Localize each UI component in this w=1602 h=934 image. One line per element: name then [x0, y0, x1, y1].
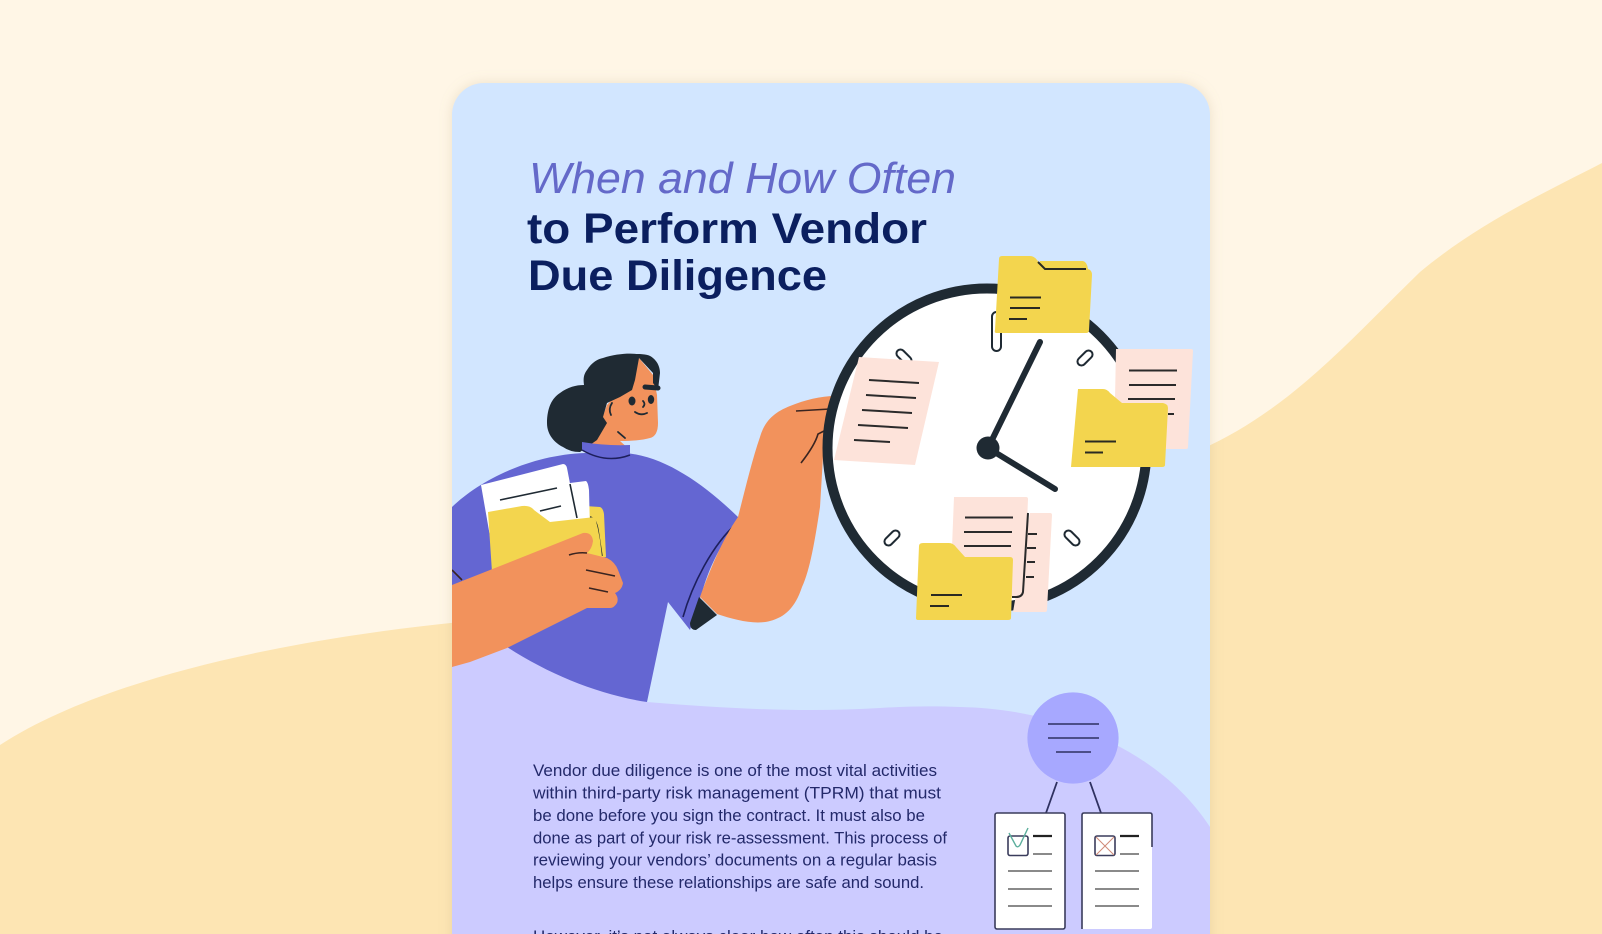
- clock hands: [976, 342, 1055, 489]
- body text: within third-party risk management (TPRM) that must: [532, 784, 941, 802]
- checklist approved: [995, 813, 1065, 929]
- left arm and hand: [452, 533, 623, 667]
- body text: done as part of your risk re-assessment. This process of: [533, 828, 947, 848]
- connectors: [1046, 782, 1101, 813]
- illustration: clock with documents: [828, 256, 1193, 620]
- title: [527, 154, 956, 300]
- face details: [610, 387, 658, 438]
- papers: [570, 481, 590, 519]
- circle node: [1027, 692, 1119, 784]
- hair: [547, 354, 660, 452]
- finger lines: [452, 553, 615, 592]
- lavender section: [452, 640, 1210, 934]
- title: When and How Often: [529, 154, 956, 203]
- background wave right: [1200, 163, 1602, 934]
- sleeve line: [682, 526, 732, 618]
- back folder: [589, 506, 606, 558]
- body text: reviewing your vendors’ documents on a regular basis: [533, 850, 937, 870]
- clock face: [828, 288, 1146, 608]
- front folder: [488, 506, 602, 572]
- body text: helps ensure these relationships are safe and sound.: [533, 873, 924, 892]
- shirt: [452, 453, 738, 702]
- background wave left: [0, 622, 460, 934]
- title: Due Diligence: [528, 252, 827, 300]
- illustration: woman holding folder: [452, 354, 836, 702]
- checklist rejected: [1082, 813, 1152, 929]
- body text: [532, 761, 947, 934]
- bottom documents and folder: [916, 497, 1052, 620]
- sleeve cuff: [690, 597, 717, 630]
- illustration: comparison diagram: [995, 692, 1152, 929]
- body text: be done before you sign the contract. It must also be: [533, 806, 925, 825]
- body text: Vendor due diligence is one of the most vital activities: [533, 761, 937, 780]
- arm lines: [796, 409, 830, 463]
- right document and folder: [1071, 349, 1193, 467]
- right arm: [700, 396, 836, 622]
- left document: [834, 357, 939, 465]
- collar: [582, 442, 630, 454]
- title: to Perform Vendor: [527, 205, 927, 253]
- top folder: [995, 256, 1092, 333]
- panel: infographic card: [452, 83, 1210, 934]
- clock tick clips: [883, 312, 1094, 547]
- neck and face: [592, 358, 658, 446]
